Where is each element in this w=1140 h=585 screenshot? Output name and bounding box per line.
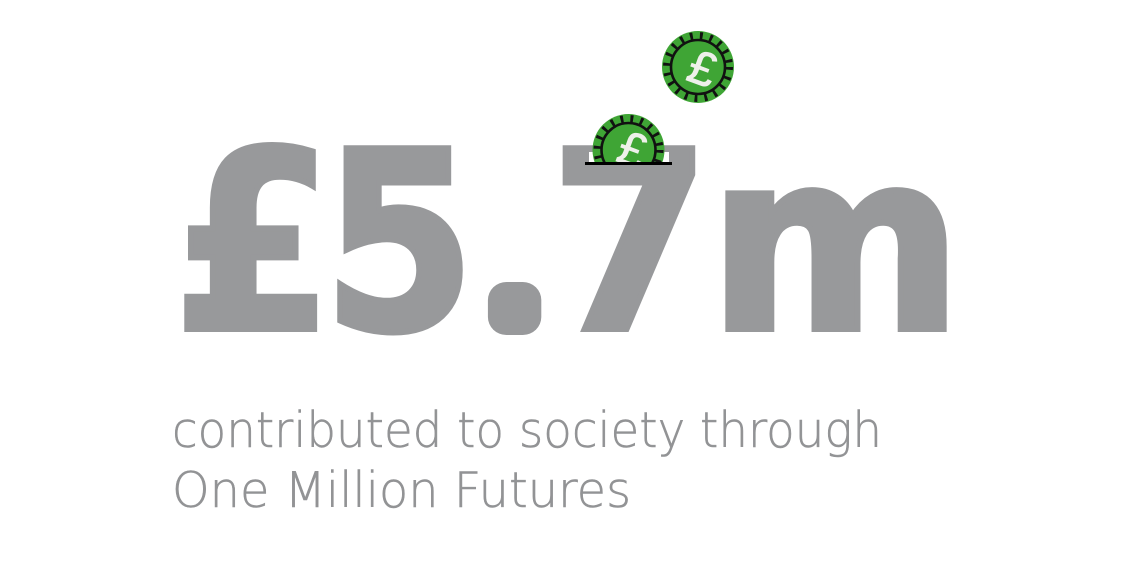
big figure: £5.7m	[173, 98, 963, 388]
big figure: £5.7m: 5	[323, 100, 475, 388]
big figure: £5.7m: .	[497, 233, 532, 339]
caption: contributed to society through	[172, 402, 882, 459]
icon: coin entering slot: £	[611, 121, 654, 180]
icon: falling coin: £	[681, 40, 724, 99]
coin slot	[585, 152, 672, 165]
big figure: £5.7m: 7	[550, 98, 711, 388]
icon: coin entering slot	[592, 114, 664, 162]
big figure: £5.7m: £	[173, 100, 333, 388]
caption: One Million Futures	[172, 462, 631, 519]
caption	[172, 402, 882, 519]
icon: falling coin	[662, 31, 734, 103]
big figure: £5.7m: m	[708, 100, 963, 388]
